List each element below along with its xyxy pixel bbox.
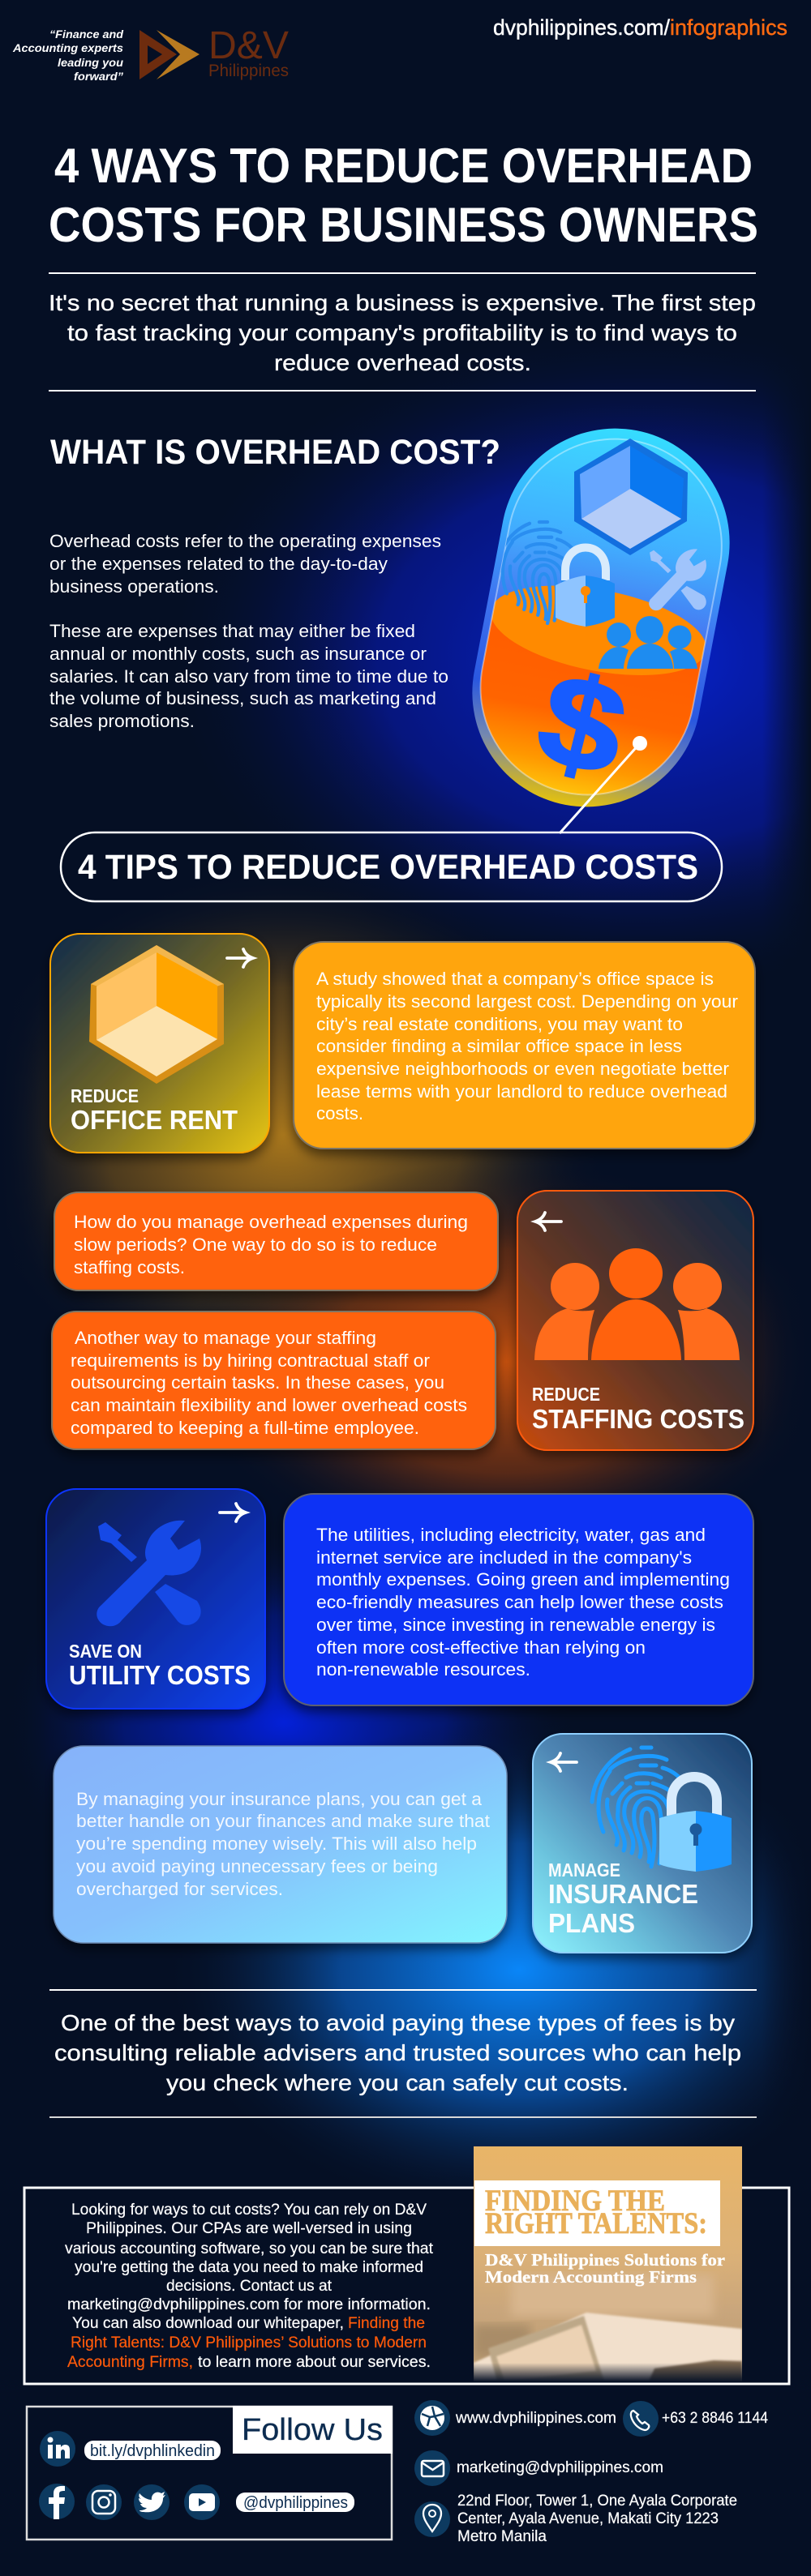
contact details xyxy=(414,2400,768,2545)
call to action text: various accounting software, so you can be sure that xyxy=(65,2240,434,2257)
card: reduce office rent xyxy=(50,934,269,1153)
call to action text: Right Talents: D&V Philippines’ Solutions to Modern xyxy=(71,2334,427,2351)
text box: office rent: expensive neighborhoods or even negotiate better xyxy=(316,1059,730,1079)
whitepaper cover xyxy=(474,2146,742,2381)
card label: INSURANCE xyxy=(548,1879,698,1909)
address: Metro Manila xyxy=(457,2528,547,2545)
capsule liquid xyxy=(480,585,706,794)
capsule illustration xyxy=(472,428,730,834)
call to action text: to learn more about our services. xyxy=(198,2354,431,2371)
cover photo xyxy=(474,2275,742,2381)
website url xyxy=(493,15,787,40)
text box: outsourcing: requirements is by hiring contractual staff or xyxy=(71,1350,431,1371)
website url: dvphilippines.com/ xyxy=(493,15,670,40)
subtitle: to fast tracking your company's profitability is to find ways to xyxy=(67,320,737,345)
call to action text: You can also download our whitepaper, xyxy=(72,2315,344,2332)
subtitle: reduce overhead costs. xyxy=(274,350,531,375)
card label: REDUCE xyxy=(532,1384,600,1405)
text box: utilities: The utilities, including electricity, water, gas and xyxy=(316,1525,706,1545)
text box: utilities: internet service are included in the company's xyxy=(316,1547,692,1568)
card label: STAFFING COSTS xyxy=(532,1404,744,1434)
card: reduce staffing costs xyxy=(517,1191,753,1450)
text box: utilities xyxy=(284,1494,753,1705)
intro text block: These are expenses that may either be fixed xyxy=(49,621,415,641)
card label: OFFICE RENT xyxy=(71,1105,238,1135)
card label: MANAGE xyxy=(548,1859,620,1881)
text box: slow periods: How do you manage overhead expenses during xyxy=(74,1212,468,1232)
padlock icon xyxy=(556,548,615,627)
title: 4 WAYS TO REDUCE OVERHEAD xyxy=(54,139,753,193)
call to action text: decisions. Contact us at xyxy=(166,2278,333,2295)
hexagon icon xyxy=(89,945,224,1084)
padlock icon xyxy=(659,1777,732,1872)
card label: PLANS xyxy=(548,1908,635,1938)
intro text block xyxy=(49,531,448,731)
arrow xyxy=(535,1213,561,1230)
tagline: forward” xyxy=(74,70,123,83)
address xyxy=(414,2493,737,2545)
text box: slow periods: staffing costs. xyxy=(74,1257,185,1277)
text box: utilities: non-renewable resources. xyxy=(316,1659,530,1680)
text box: slow periods xyxy=(54,1192,498,1290)
arrow xyxy=(227,949,253,967)
capsule shell xyxy=(453,409,749,826)
header: logo and tagline xyxy=(12,24,289,83)
text box: outsourcing: compared to keeping a full-time employee. xyxy=(71,1418,419,1438)
text box: office rent xyxy=(294,942,755,1149)
phone: +63 2 8846 1144 xyxy=(662,2410,768,2427)
card: save on utility costs xyxy=(46,1489,265,1709)
dollar icon: $ xyxy=(525,645,639,804)
cube icon xyxy=(574,439,688,555)
icon: linkedin xyxy=(40,2431,75,2467)
tagline: leading you xyxy=(58,56,123,69)
tip 3: utility costs xyxy=(46,1489,753,1709)
cover subtitle: D&V Philippines Solutions for xyxy=(485,2250,725,2270)
text box: outsourcing: can maintain flexibility and lower overhead costs xyxy=(71,1395,467,1415)
closing statement: consulting reliable advisers and trusted sources who can help xyxy=(54,2040,741,2065)
text box: insurance: you’re spending money wisely. This will also help xyxy=(76,1834,477,1854)
text box: outsourcing: Another way to manage your staffing xyxy=(75,1328,376,1348)
title xyxy=(49,139,758,252)
card label: REDUCE xyxy=(71,1085,139,1106)
cover subtitle: Modern Accounting Firms xyxy=(485,2267,697,2287)
cover banner xyxy=(474,2180,720,2246)
fingerprint icon xyxy=(592,1748,681,1867)
section banner: 4 tips: 4 TIPS TO REDUCE OVERHEAD COSTS xyxy=(78,848,698,887)
text box: utilities: eco-friendly measures can help lower these costs xyxy=(316,1592,723,1612)
intro text block: sales promotions. xyxy=(49,711,195,731)
card label xyxy=(548,1859,698,1938)
card label xyxy=(532,1384,744,1434)
closing statement xyxy=(54,2010,741,2095)
text box: insurance: you avoid paying unnecessary fees or being xyxy=(76,1856,438,1876)
follow us label xyxy=(233,2406,393,2454)
text box: utilities: monthly expenses. Going green and implementing xyxy=(316,1569,730,1590)
email xyxy=(414,2450,663,2486)
text box: office rent: lease terms with your landlord to reduce overhead xyxy=(316,1081,727,1102)
tip 4: insurance plans xyxy=(54,1734,752,1953)
logo mark xyxy=(139,30,200,79)
intro text block: or the expenses related to the day-to-day xyxy=(49,554,388,574)
cover subtitle xyxy=(485,2250,725,2287)
text box: office rent: consider finding a similar office space in less xyxy=(316,1036,682,1056)
people icon xyxy=(599,616,697,669)
tools icon xyxy=(97,1521,201,1626)
phone xyxy=(623,2401,768,2437)
logo wordmark: Philippines xyxy=(208,62,289,80)
text box: utilities: often more cost-effective than relying on xyxy=(316,1637,646,1658)
icon: twitter xyxy=(134,2484,169,2520)
intro text block: Overhead costs refer to the operating expenses xyxy=(49,531,441,551)
call to action panel xyxy=(24,2146,789,2384)
connector xyxy=(560,736,647,833)
people icon xyxy=(534,1248,740,1360)
call to action text: marketing@dvphilippines.com for more information. xyxy=(67,2296,431,2313)
card label: UTILITY COSTS xyxy=(69,1660,251,1690)
text box: insurance: By managing your insurance plans, you can get a xyxy=(76,1789,482,1809)
text box: office rent: typically its second largest cost. Depending on your xyxy=(316,991,739,1012)
icon: facebook xyxy=(39,2484,75,2519)
fingerprint icon xyxy=(497,522,573,623)
tagline: Accounting experts xyxy=(12,41,123,54)
subtitle: It's no secret that running a business is expensive. The first step xyxy=(49,290,756,315)
intro text block: business operations. xyxy=(49,576,219,597)
text box: office rent: city’s real estate conditions, you may want to xyxy=(316,1014,683,1034)
text box: insurance: better handle on your finances and make sure that xyxy=(76,1811,491,1831)
follow us panel xyxy=(27,2406,393,2540)
logo wordmark: D&V xyxy=(208,24,289,67)
text box: insurance: overcharged for services. xyxy=(76,1879,283,1899)
follow us label: Follow Us xyxy=(242,2413,383,2447)
arrow xyxy=(551,1753,577,1771)
capsule rim xyxy=(462,421,740,813)
call to action text: Finding the xyxy=(348,2315,425,2332)
card label xyxy=(71,1085,238,1135)
closing statement: you check where you can safely cut costs. xyxy=(166,2070,629,2095)
text box: outsourcing: outsourcing certain tasks. In these cases, you xyxy=(71,1372,444,1393)
heading: what is overhead cost: WHAT IS OVERHEAD COST? xyxy=(50,433,500,472)
tip 1: office rent xyxy=(50,934,755,1153)
website xyxy=(414,2400,616,2436)
intro text block: annual or monthly costs, such as insurance or xyxy=(49,644,427,664)
call to action text: you're getting the data you need to make informed xyxy=(75,2259,423,2276)
title: COSTS FOR BUSINESS OWNERS xyxy=(49,198,758,252)
address: 22nd Floor, Tower 1, One Ayala Corporate xyxy=(457,2493,737,2510)
icon: youtube xyxy=(184,2484,220,2520)
tip 2: staffing costs xyxy=(52,1191,753,1450)
text box: outsourcing xyxy=(52,1312,496,1449)
cover title xyxy=(485,2184,707,2240)
social handle: @dvphilippines xyxy=(243,2494,348,2512)
text box: office rent: A study showed that a company’s office space is xyxy=(316,969,714,989)
closing statement: One of the best ways to avoid paying these types of fees is by xyxy=(61,2010,735,2035)
call to action text: Accounting Firms, xyxy=(67,2354,193,2371)
linkedin handle: bit.ly/dvphlinkedin xyxy=(90,2442,215,2460)
tagline xyxy=(12,28,123,83)
call to action text xyxy=(65,2202,434,2371)
tools icon xyxy=(649,549,706,610)
website: www.dvphilippines.com xyxy=(455,2410,616,2427)
card label: SAVE ON xyxy=(69,1641,142,1662)
cover title: FINDING THE xyxy=(485,2184,665,2218)
card: manage insurance plans xyxy=(533,1734,752,1953)
text box: insurance xyxy=(54,1746,507,1943)
website url: infographics xyxy=(670,15,787,40)
card label xyxy=(69,1641,251,1690)
cover title: RIGHT TALENTS: xyxy=(485,2207,707,2240)
intro text block: salaries. It can also vary from time to time due to xyxy=(49,666,448,687)
tagline: “Finance and xyxy=(49,28,123,41)
text box: office rent: costs. xyxy=(316,1103,363,1123)
text box: slow periods: slow periods? One way to do so is to reduce xyxy=(74,1235,437,1255)
arrow xyxy=(220,1504,246,1521)
section banner: 4 tips xyxy=(61,832,722,901)
call to action text: Philippines. Our CPAs are well-versed in using xyxy=(86,2220,412,2237)
icon: instagram xyxy=(86,2484,122,2520)
call to action text: Looking for ways to cut costs? You can rely on D&V xyxy=(71,2202,427,2219)
address: Center, Ayala Avenue, Makati City 1223 xyxy=(457,2510,719,2527)
text box: utilities: over time, since investing in renewable energy is xyxy=(316,1615,715,1635)
subtitle xyxy=(49,290,756,375)
intro text block: the volume of business, such as marketing and xyxy=(49,688,436,708)
email: marketing@dvphilippines.com xyxy=(457,2459,663,2476)
